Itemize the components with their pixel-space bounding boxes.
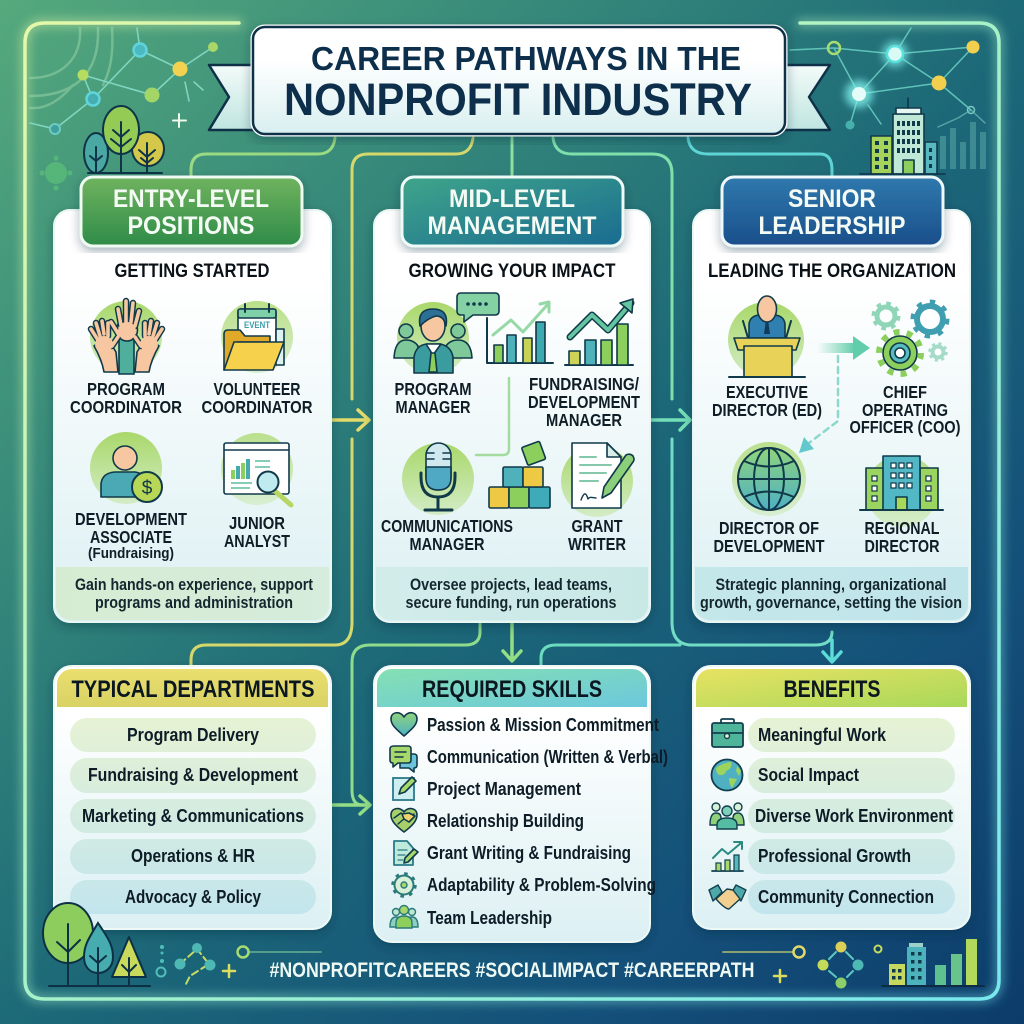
pill: advocacy and policy: [70, 880, 316, 914]
description: Gain hands-on experience, support: [75, 576, 313, 594]
icon: building blocks: [489, 441, 550, 508]
pill: program delivery: Program Delivery: [127, 725, 259, 745]
title banner: [209, 27, 830, 134]
panel: mid-level management: [374, 177, 650, 622]
benefit: meaningful work: [712, 718, 955, 752]
benefit: diverse work environment: Diverse Work Environment: [755, 806, 953, 826]
benefit: diverse work environment: [710, 799, 955, 833]
description: programs and administration: [95, 594, 293, 612]
benefit: social impact: [712, 758, 955, 793]
role: chief operating officer: OFFICER (COO): [850, 417, 960, 437]
tab: mid-level: MANAGEMENT: [428, 212, 596, 240]
icon: growth chart two: [565, 299, 633, 365]
pill: fundraising and development: [70, 758, 316, 793]
role: communications manager: COMMUNICATIONS: [381, 516, 513, 536]
pill: advocacy and policy: Advocacy & Policy: [125, 887, 261, 907]
arrow: mid to senior: [650, 410, 690, 430]
role: grant writer: GRANT: [572, 516, 623, 536]
role: fundraising development manager: [528, 374, 640, 430]
ribbon left: [209, 65, 256, 130]
pill: marketing and communications: [70, 799, 316, 833]
role: development associate: [75, 509, 187, 562]
role: program manager: PROGRAM: [394, 379, 472, 399]
role: development associate: (Fundraising): [88, 545, 174, 562]
benefit: community connection: Community Connection: [758, 887, 934, 907]
tab: senior: LEADERSHIP: [758, 212, 906, 240]
icon: signed document and pen: [561, 443, 634, 517]
skill: passion: [391, 713, 659, 736]
subtitle: GETTING STARTED: [114, 261, 270, 282]
role: communications manager: [381, 516, 513, 554]
description: growth, governance, setting the vision: [700, 594, 962, 612]
subtitle: GROWING YOUR IMPACT: [408, 261, 616, 282]
role: development associate: DEVELOPMENT: [75, 509, 187, 529]
tab: mid-level: [402, 177, 623, 246]
role: junior analyst: JUNIOR: [229, 513, 285, 533]
description: Oversee projects, lead teams,: [410, 576, 612, 594]
role: fundraising development manager: MANAGER: [546, 410, 622, 430]
tab: mid-level: MID-LEVEL: [449, 185, 575, 213]
role: executive director: EXECUTIVE: [726, 382, 808, 402]
benefit: professional growth: [712, 839, 955, 874]
role: regional director: REGIONAL: [864, 518, 940, 538]
panel: typical departments: [54, 666, 331, 929]
benefit: meaningful work: Meaningful Work: [758, 725, 887, 745]
role: fundraising development manager: FUNDRAISING/: [529, 374, 639, 394]
icon: microphone: [402, 443, 474, 515]
role: junior analyst: ANALYST: [224, 531, 290, 551]
icon: speaker at podium: [728, 296, 805, 378]
panel: senior leadership: [693, 177, 970, 622]
role: program coordinator: PROGRAM: [87, 379, 165, 399]
role: executive director: [712, 382, 822, 420]
icon: person with dollar coin: $: [142, 478, 153, 499]
tab: senior: [722, 177, 943, 246]
skill: adaptability: Adaptability & Problem-Solving: [427, 875, 656, 895]
network decoration bottom right: [723, 942, 882, 988]
role: program coordinator: [70, 379, 182, 417]
benefit: community connection: [709, 880, 955, 914]
role: volunteer coordinator: [202, 379, 313, 417]
pill: operations and HR: Operations & HR: [131, 846, 255, 866]
description: [700, 576, 962, 612]
role: fundraising development manager: DEVELOPMENT: [528, 392, 640, 412]
icon: person with dollar coin: [90, 432, 162, 504]
arrow: mid to skills: [503, 622, 521, 661]
role: development associate: ASSOCIATE: [90, 527, 172, 547]
skill: grant writing: Grant Writing & Fundraising: [427, 843, 631, 863]
subtitle: LEADING THE ORGANIZATION: [708, 261, 956, 282]
connector inside card: [476, 378, 509, 455]
connector lines: [191, 138, 832, 805]
role: program manager: MANAGER: [396, 397, 471, 417]
heading: REQUIRED SKILLS: [422, 676, 602, 703]
icon: growth chart one: [487, 302, 553, 363]
arrow: senior to benefits: [823, 640, 841, 662]
role: chief operating officer: OPERATING: [862, 400, 948, 420]
role: program coordinator: COORDINATOR: [70, 397, 182, 417]
benefit: professional growth: Professional Growth: [758, 846, 911, 866]
pill: program delivery: [70, 718, 316, 752]
icon: gears: [874, 302, 947, 374]
skill: passion: Passion & Mission Commitment: [427, 715, 659, 735]
hashtags: #NONPROFITCAREERS #SOCIALIMPACT #CAREERPATH: [270, 959, 754, 982]
skill: relationship building: Relationship Building: [427, 811, 584, 831]
skill: team leadership: Team Leadership: [427, 908, 552, 928]
description: secure funding, run operations: [406, 594, 616, 612]
pill: fundraising and development: Fundraising & Development: [88, 765, 298, 785]
icon: buildings and bars bottom right: [882, 939, 984, 986]
icon: analyst window: [221, 433, 293, 505]
skill: communication: [390, 746, 668, 772]
description: [75, 576, 313, 612]
benefit: social impact: Social Impact: [758, 765, 859, 785]
panel: benefits: [693, 666, 970, 929]
icon: office building: [860, 455, 943, 527]
icon: raised hands: [90, 301, 162, 374]
tab: senior: SENIOR: [788, 185, 876, 213]
icon: speech bubble: [457, 293, 499, 322]
network decoration top left: [30, 28, 218, 190]
skill: adaptability: [393, 874, 656, 896]
role: director of development: DEVELOPMENT: [714, 536, 825, 556]
ribbon right: [782, 65, 830, 130]
icon: trees bottom left: [43, 903, 150, 986]
skill: communication: Communication (Written & Verbal): [427, 747, 668, 767]
role: communications manager: MANAGER: [410, 534, 485, 554]
role: director of development: [714, 518, 825, 556]
role: regional director: [864, 518, 940, 556]
role: volunteer coordinator: COORDINATOR: [202, 397, 313, 417]
tab: entry-level: POSITIONS: [128, 212, 254, 240]
network decoration bottom left: [156, 943, 321, 984]
skill: team leadership: [390, 906, 552, 928]
role: executive director: DIRECTOR (ED): [712, 400, 822, 420]
skill: project management: [393, 777, 581, 800]
network decoration top right: [790, 28, 986, 169]
panel: required skills: [374, 666, 668, 942]
icon: manager with team: [394, 302, 472, 374]
arrow: dashed ED to director of development: [799, 356, 838, 453]
icon: event folder: EVENT: [244, 320, 270, 330]
role: volunteer coordinator: VOLUNTEER: [214, 379, 301, 399]
role: junior analyst: [224, 513, 290, 551]
description: [406, 576, 616, 612]
title line 1: CAREER PATHWAYS IN THE: [311, 40, 741, 77]
title line 2: NONPROFIT INDUSTRY: [284, 74, 752, 125]
role: regional director: DIRECTOR: [864, 536, 940, 556]
icon: office buildings top right: [860, 98, 945, 174]
arrow: entry to mid: [331, 410, 369, 430]
role: chief operating officer: CHIEF: [883, 382, 927, 402]
arrow: ED to COO: [817, 336, 870, 360]
icon: event folder: [221, 301, 293, 373]
heading: TYPICAL DEPARTMENTS: [72, 676, 314, 703]
tab: entry-level: [81, 177, 302, 246]
panel: entry-level positions: [54, 177, 331, 622]
description: Strategic planning, organizational: [716, 576, 946, 594]
tab: entry-level: ENTRY-LEVEL: [113, 185, 269, 213]
icon: globe: [732, 442, 806, 516]
role: chief operating officer: [850, 382, 960, 437]
heading: BENEFITS: [784, 676, 880, 703]
pill: operations and HR: [70, 839, 316, 874]
icon: trees top left: [84, 106, 164, 173]
skill: relationship building: [391, 809, 584, 832]
role: director of development: DIRECTOR OF: [719, 518, 819, 538]
role: program manager: [394, 379, 472, 417]
role: grant writer: [568, 516, 626, 554]
pill: marketing and communications: Marketing & Communications: [82, 806, 304, 826]
role: grant writer: WRITER: [568, 534, 626, 554]
skill: grant writing: [394, 841, 631, 865]
arrow: departments to skills: [332, 796, 370, 814]
skill: project management: Project Management: [427, 779, 581, 799]
